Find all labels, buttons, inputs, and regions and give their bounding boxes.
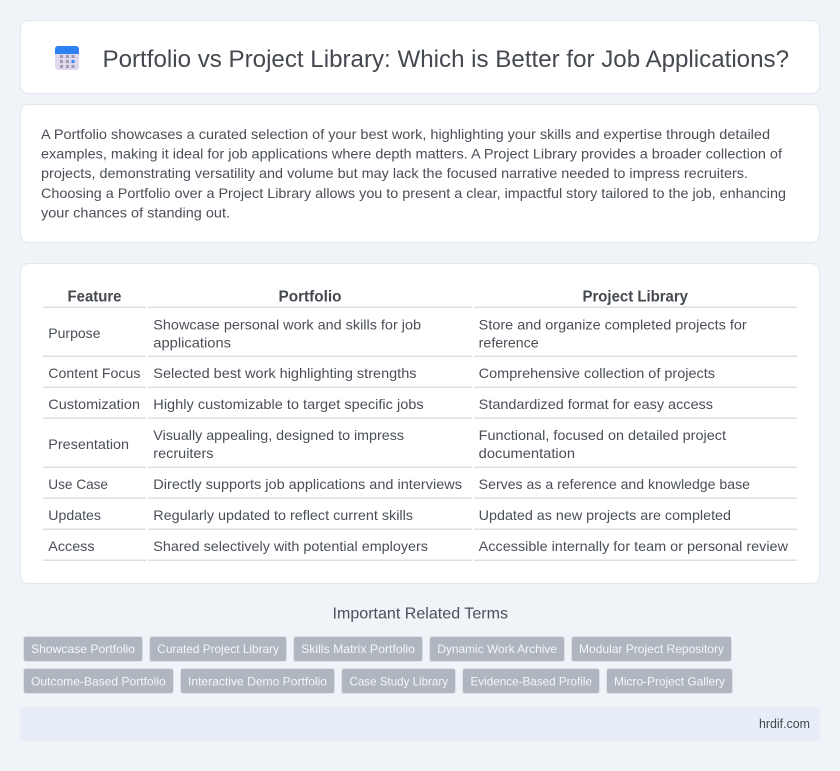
panel: header xyxy=(20,20,820,94)
row: use case: Directly supports job applications and interviews xyxy=(153,476,462,492)
intro paragraph: your chances of standing out. xyxy=(41,204,230,220)
intro paragraph: A Portfolio showcases a curated selection of your best work, highlighting your skills and expertise through detailed xyxy=(41,126,770,142)
row: customization xyxy=(48,396,713,412)
row: customization: Highly customizable to target specific jobs xyxy=(153,396,424,412)
tag xyxy=(24,668,174,694)
row: presentation: recruiters xyxy=(153,445,214,461)
row: purpose xyxy=(48,316,747,350)
row: use case: Serves as a reference and knowledge base xyxy=(479,476,750,492)
intro paragraph: examples, making it ideal for job applications where depth matters. A Project Library provides a broader collection of xyxy=(41,146,782,162)
tag xyxy=(24,636,142,662)
tag xyxy=(430,636,564,662)
intro paragraph xyxy=(41,126,786,220)
row: content focus: Comprehensive collection of projects xyxy=(479,365,715,381)
tag: Showcase Portfolio xyxy=(31,642,135,656)
tag: Evidence-Based Profile xyxy=(470,674,592,688)
panel: intro text xyxy=(20,104,820,242)
row: content focus: Content Focus xyxy=(48,365,140,381)
row: purpose: Showcase personal work and skills for job xyxy=(153,316,421,332)
row: presentation: Visually appealing, designed to impress xyxy=(153,427,404,443)
row: updates xyxy=(48,507,731,523)
tag: Micro-Project Gallery xyxy=(614,674,725,688)
row: purpose: Store and organize completed projects for xyxy=(479,316,747,332)
table header row: Project Library xyxy=(582,289,688,306)
table header row: Portfolio xyxy=(278,289,342,306)
footer xyxy=(20,707,820,741)
tag: Case Study Library xyxy=(350,674,448,688)
row: customization: Customization xyxy=(48,396,140,412)
tag xyxy=(572,636,732,662)
row: customization: Standardized format for easy access xyxy=(479,396,713,412)
intro paragraph: projects, demonstrating versatility and volume but may lack the focused narrative needed to impress recruiters. xyxy=(41,165,748,181)
intro paragraph: Choosing a Portfolio over a Project Library allows you to present a clear, impactful story tailored to the job, enhancing xyxy=(41,185,786,201)
row: access: Accessible internally for team or personal review xyxy=(479,538,789,554)
row: use case xyxy=(48,476,750,492)
tags: related terms xyxy=(24,636,732,694)
table header row: Feature xyxy=(68,289,122,306)
row: updates: Regularly updated to reflect current skills xyxy=(153,507,413,523)
row: purpose: applications xyxy=(153,334,231,350)
icon: calendar xyxy=(55,46,79,70)
panel: comparison table xyxy=(20,264,820,584)
row: purpose: Purpose xyxy=(48,325,101,341)
tag xyxy=(342,668,456,694)
row: presentation xyxy=(48,427,726,461)
heading: important related terms: Important Related Terms xyxy=(332,605,508,622)
row: presentation: Functional, focused on detailed project xyxy=(479,427,726,443)
tag: Outcome-Based Portfolio xyxy=(31,674,166,688)
row: purpose: reference xyxy=(479,334,539,350)
row: updates: Updated as new projects are completed xyxy=(479,507,731,523)
row: access: Access xyxy=(48,538,94,554)
row: access: Shared selectively with potential employers xyxy=(153,538,428,554)
tag: Modular Project Repository xyxy=(579,642,724,656)
row: access xyxy=(48,538,789,554)
tag: Skills Matrix Portfolio xyxy=(301,642,415,656)
tag xyxy=(606,668,732,694)
table header row xyxy=(68,289,688,306)
row: use case: Use Case xyxy=(48,476,108,492)
tag xyxy=(150,636,286,662)
footer: hrdif.com xyxy=(759,716,810,731)
tag xyxy=(294,636,422,662)
tag: Curated Project Library xyxy=(157,642,279,656)
title: Portfolio vs Project Library: Which is Better for Job Applications? xyxy=(102,46,789,73)
row: updates: Updates xyxy=(48,507,101,523)
row: presentation: documentation xyxy=(479,445,575,461)
row: content focus: Selected best work highlighting strengths xyxy=(153,365,417,381)
tag: Dynamic Work Archive xyxy=(437,642,557,656)
tag xyxy=(462,668,600,694)
tag xyxy=(180,668,334,694)
row: presentation: Presentation xyxy=(48,436,129,452)
tag: Interactive Demo Portfolio xyxy=(188,674,327,688)
row: content focus xyxy=(48,365,715,381)
